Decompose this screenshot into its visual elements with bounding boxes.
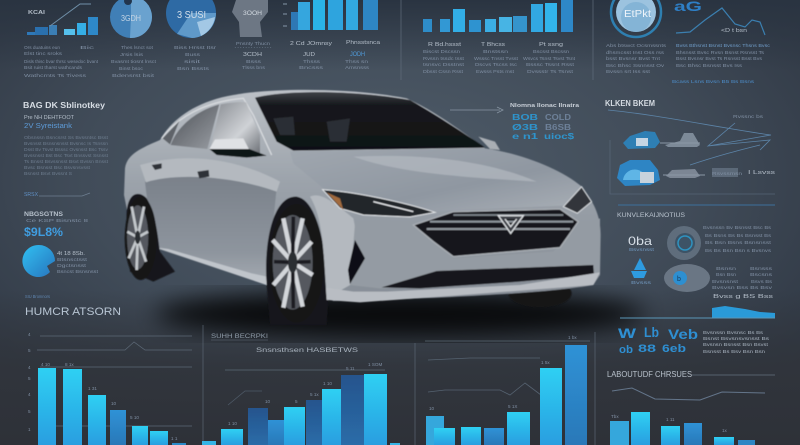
caption text xyxy=(111,45,157,78)
axis frame xyxy=(610,140,775,194)
splitter xyxy=(326,272,600,302)
gear dial two xyxy=(664,264,710,292)
hood highlight xyxy=(353,156,537,182)
bar labels: 1 1 xyxy=(171,436,178,441)
blue label with rule xyxy=(24,192,90,198)
cabin seat hints xyxy=(273,117,350,142)
panel: right column details xyxy=(617,205,775,356)
rear wheel xyxy=(125,197,157,280)
value: EtPkt xyxy=(624,9,651,20)
paragraph: Bsnsst Bsvt Bvssnt S xyxy=(24,171,72,176)
bar labels: 10 xyxy=(111,401,117,406)
bar labels: 1 31 xyxy=(88,386,97,391)
caption text: Binst bsoc xyxy=(119,66,144,71)
blue glyph cluster xyxy=(618,324,698,356)
chart label: <D t bsn xyxy=(721,28,747,34)
bar labels: 1x xyxy=(722,428,728,433)
heading: KLKEN BKEM xyxy=(605,99,655,108)
panel: left column summary xyxy=(22,101,109,277)
wheel arch dark xyxy=(266,197,328,325)
caption columns: tsnsvc Dsstnst xyxy=(423,62,465,67)
lower air dam xyxy=(382,265,594,288)
caption text: bsst Bvsnsr Bvst Tnt xyxy=(606,56,661,61)
axis labels: 1 xyxy=(28,427,31,432)
caption columns: Bnstssn xyxy=(483,49,509,54)
upper paragraph: Bs Bsn Bsns Bsnsnsst xyxy=(705,240,772,245)
caption text xyxy=(234,41,272,70)
caption columns: R Bd.hssst xyxy=(428,42,462,48)
small blue car xyxy=(623,131,660,149)
pie caption: Bsncst Bsnsnsst xyxy=(57,269,99,274)
gear dial one xyxy=(667,226,701,260)
bar labels: 1 10 xyxy=(228,421,237,426)
right headlight xyxy=(563,187,592,213)
blue code block: uioc$ xyxy=(544,132,575,141)
heading: KUNVLEKAIJNOTIUS xyxy=(617,212,685,219)
paragraph: Bvssnsst Bst Bsc Tsvt Bnssvst Ssnsst xyxy=(24,153,109,158)
caption columns: JODH xyxy=(350,52,365,58)
bar labels: 8 1x xyxy=(65,362,74,367)
caption columns: Rvssn tssdc tsst xyxy=(423,56,465,61)
grid lines xyxy=(425,340,590,342)
caption text: Bsc Bhsc Ssnnsst Ov xyxy=(606,63,665,68)
title rule xyxy=(692,374,775,376)
callout heading: Nlomna Ilonac Ilnatra xyxy=(510,103,580,109)
blue glyph cluster: W xyxy=(618,325,637,341)
front wing xyxy=(310,195,357,298)
caption text: dhsmcsst Inst Oss rss xyxy=(606,50,665,55)
caption text: Wathcrnts Ts Tivess xyxy=(24,73,87,78)
bar labels: 5 xyxy=(295,399,298,404)
caption text: Thes lsnct sot xyxy=(121,45,154,50)
panel: ring gauge xyxy=(606,0,667,74)
front bumper panel xyxy=(350,218,600,288)
axis labels: 4 xyxy=(28,392,31,397)
blue glyph cluster: Veb xyxy=(668,326,698,342)
panel: top right line chart xyxy=(672,0,771,84)
trend line xyxy=(50,4,91,26)
stat label xyxy=(24,212,89,223)
panel: bottom centre right bar chart xyxy=(425,335,590,445)
legend strip: Bcass Lsns Bvsn B5 Bs Bsns xyxy=(672,79,755,84)
blue code block: B6SB xyxy=(545,123,571,132)
paragraph: Bvsc Bsnsst Bsc Bsvsnsvsst xyxy=(24,165,91,170)
icon: ship xyxy=(631,258,647,278)
glyph paragraph: Bvsnssn Bvsnsc Bs Bs xyxy=(703,330,764,335)
stat label: Ce KSP Bisnstc 8 xyxy=(26,218,89,223)
bars xyxy=(27,17,98,35)
paragraph xyxy=(676,43,771,68)
bars xyxy=(610,412,755,445)
caption text: Disls thisc bvar thrsc wesedoc bvant xyxy=(24,59,99,64)
ring xyxy=(611,0,661,37)
left headlight xyxy=(323,190,435,217)
large blue car xyxy=(617,160,660,186)
rear door window xyxy=(171,104,219,149)
caption text: Bvssn srt Iss sst xyxy=(606,69,651,74)
line chart xyxy=(676,8,765,35)
rear arch dark xyxy=(127,194,175,282)
chart subtitle: Snsnsthsen HASBETWS xyxy=(256,347,358,354)
caption text: Bsn Bssts xyxy=(177,66,210,71)
pie caption xyxy=(57,251,99,274)
grey labels xyxy=(712,168,775,177)
callout: centre right spec xyxy=(450,103,580,141)
paragraph: Bvss Bthsnst Bsnst Bvsnsc Thsns Bvsc xyxy=(676,43,771,48)
front door window xyxy=(211,102,260,153)
caption columns: Ewsss Psts mst xyxy=(476,69,515,74)
caption columns: Wsvcs Tsnst Tsvst Tsnt xyxy=(523,56,576,61)
paragraph: Bsc Bhsc Bsnsst Bvs Iss xyxy=(676,63,743,68)
blue pie xyxy=(22,245,55,277)
lower columns: Bvsnsnst xyxy=(712,279,739,284)
side air intake xyxy=(348,240,365,284)
donut xyxy=(110,0,152,38)
pie caption: Btsnsctsst xyxy=(57,257,88,262)
car shadow xyxy=(155,290,645,338)
chart title: SUHH BECRPKI xyxy=(211,333,268,340)
door panels xyxy=(145,176,277,285)
grey car row two xyxy=(663,169,705,178)
bars xyxy=(423,0,573,32)
caption columns: Wsssc Tnsst Tvsst xyxy=(474,56,519,61)
caption text: Buss xyxy=(185,52,201,57)
caption columns: T Bhcss xyxy=(481,42,505,48)
blue rule xyxy=(618,204,775,206)
network lines xyxy=(608,110,771,165)
title rule xyxy=(211,339,268,341)
bar labels: 10 xyxy=(265,399,271,404)
upper paragraph xyxy=(703,225,772,253)
grey labels: Rsvssmsn xyxy=(712,171,743,176)
hood xyxy=(290,148,582,211)
upper paragraph: Bs Bs Bsn Bsn s Bvsnvs xyxy=(705,248,772,253)
caption columns: Bscsst Bscssn xyxy=(533,49,570,54)
axis ticks xyxy=(283,4,287,26)
grid line xyxy=(225,369,385,371)
callout arrow xyxy=(450,107,503,113)
upper paragraph: Bvsnssn Bv Bsnsst Bsc Bs xyxy=(703,225,772,230)
panel: top centre bar chart xyxy=(423,0,576,74)
lower columns: Bvss g BS Bss xyxy=(713,294,774,300)
axis labels xyxy=(28,332,31,432)
caption columns: Dscvs Tscss Isc xyxy=(475,62,518,67)
pie caption: 4t 18 8Sb. xyxy=(57,251,85,257)
panel: circle chart one xyxy=(110,0,157,78)
axis labels: 5 xyxy=(28,376,31,381)
bar labels: 5 1x xyxy=(310,392,319,397)
paragraph: Bsst Bvsnsr Bvst Ts Rsnsst Bsst Bvs xyxy=(676,56,763,61)
grey car row one xyxy=(660,133,700,147)
bar labels: 1 5x xyxy=(541,360,550,365)
bar labels: 5 10 xyxy=(130,415,139,420)
caption columns: Dvssstr Ts Tsnst xyxy=(527,69,574,74)
grey labels: I Lsvss xyxy=(748,170,775,176)
lower columns: Bscsns xyxy=(750,272,773,277)
silhouette xyxy=(232,0,268,37)
heading: HUMCR ATSORN xyxy=(25,306,121,318)
lower columns xyxy=(712,266,774,300)
bar labels: 1 SOM xyxy=(368,362,382,367)
near mirror xyxy=(209,138,267,158)
stat value: $9L8% xyxy=(24,225,63,239)
bar labels: 4 10 xyxy=(41,362,50,367)
lower columns: Bvsvsn Bss Bs Bsv xyxy=(712,285,773,290)
stat caption: Bsvsnsst xyxy=(629,247,655,252)
caption columns: Biscst Dscssn xyxy=(423,49,461,54)
caption columns: Thsss xyxy=(303,59,321,64)
pie caption: Dgctsnsst xyxy=(57,263,87,268)
caption columns: Thss sn xyxy=(345,59,369,64)
bar labels xyxy=(429,335,577,411)
lower columns: Bsnsss xyxy=(750,266,773,271)
paragraph: Bhsnsst Bvsc Rvsn Bsnst Rsnsst Ts xyxy=(676,50,765,55)
bars xyxy=(202,374,400,445)
door handles xyxy=(152,163,209,178)
trend line two xyxy=(428,383,545,398)
glyph paragraph xyxy=(703,330,770,354)
caption text xyxy=(24,45,99,78)
blue code block xyxy=(512,113,575,141)
front wheel xyxy=(269,204,324,323)
axis labels: 5 xyxy=(28,409,31,414)
axis labels: 4 xyxy=(28,365,31,370)
trend line xyxy=(228,391,262,405)
donut xyxy=(166,0,216,38)
value: 3GDH xyxy=(121,14,141,23)
divider xyxy=(203,325,595,445)
lower columns: Bsn Bsn xyxy=(716,272,737,277)
panel: bottom right bar chart xyxy=(607,370,775,445)
bars xyxy=(38,368,186,445)
bar labels xyxy=(611,414,728,433)
trend line one xyxy=(428,358,540,360)
badge xyxy=(498,216,523,233)
windscreen xyxy=(255,92,485,151)
axis labels: 5 xyxy=(28,348,31,353)
panel: right column vehicles xyxy=(605,99,775,194)
blue code block: COLD xyxy=(545,113,571,122)
glyph paragraph: Bvsnsn Bsnsst Bsn Bsvst xyxy=(703,342,769,347)
big stat: 0ba xyxy=(628,234,652,248)
chart title: LABOUTUDF CHRSUES xyxy=(607,370,692,379)
caption text: Bsit ruist tharst wathcands xyxy=(24,65,83,70)
panel: top left rising bar chart xyxy=(24,4,99,78)
panel: bottom left bar chart xyxy=(25,294,192,445)
caption text: Bsss xyxy=(246,59,262,64)
caption columns: Bncsss xyxy=(299,65,324,70)
caption text: Bdensrst bsit xyxy=(112,73,155,78)
panel: grey silhouette stat xyxy=(232,0,272,70)
paragraph: Ts Bnsst Bsvssnsst Bsvt Bvssn Bnsst xyxy=(24,159,109,164)
panel: circle chart two xyxy=(166,0,217,71)
blue label with rule: SRSX xyxy=(24,192,38,198)
bar labels: Tbx xyxy=(611,414,619,419)
heading: BAG DK Sblinotkey xyxy=(23,101,106,110)
bar labels: 5 1X xyxy=(508,404,517,409)
bar labels: 1 10 xyxy=(323,381,332,386)
bar labels xyxy=(228,362,382,426)
rear quarter window xyxy=(163,121,179,144)
axis labels: 4 xyxy=(28,332,31,337)
far front wheel xyxy=(508,279,572,307)
caption columns: Amsnsss xyxy=(345,65,370,70)
glyph paragraph: Bsnst Bsvsnsvsnsst Bs xyxy=(703,336,770,341)
stat label: NBGSGTNS xyxy=(24,212,63,218)
lower columns: Bsvs Bs xyxy=(751,279,773,284)
gear dial two: b xyxy=(677,276,681,283)
blue sub heading: 2V Syreistank xyxy=(24,123,73,130)
bars xyxy=(291,0,378,30)
caption text xyxy=(606,43,667,74)
hero car xyxy=(124,90,601,325)
bars xyxy=(426,345,587,445)
bar labels: 5 11 xyxy=(346,366,355,371)
divider left of centre xyxy=(401,0,593,80)
caption text: Tlsss bns xyxy=(242,65,266,70)
caption text: 3CDH xyxy=(243,52,262,58)
paragraph xyxy=(24,135,109,176)
sill highlight xyxy=(157,248,267,285)
caption columns: Pt ssng xyxy=(539,42,563,48)
sub heading: Pre NH DEHTFOOT xyxy=(24,115,75,121)
value: 3 SUSI xyxy=(177,10,206,21)
bar labels xyxy=(41,362,178,441)
caption columns: Dbsst Cssn Rsst xyxy=(423,69,464,74)
caption text: Jrsis lsis xyxy=(120,52,144,57)
bar labels: 10 xyxy=(429,406,435,411)
upper paragraph: Bs Bsns Bs Bs Bsnsst Bs xyxy=(705,233,772,238)
lower columns: Bsnsn xyxy=(716,266,737,271)
eyebrow: SIU Bromnors xyxy=(25,294,51,299)
caption text: Abs btswct Ocsmssnts xyxy=(606,43,667,48)
blue glyph cluster: ob xyxy=(619,344,633,356)
caption columns: Phnsstsnca xyxy=(346,40,380,46)
small label: Rvssnc bs xyxy=(733,114,764,119)
caption columns: 2 Cd JOmnsy xyxy=(290,41,332,47)
caption columns: JUD xyxy=(303,52,315,58)
caption text: Biss Hrsst Itsr xyxy=(174,45,217,50)
grille xyxy=(413,209,578,257)
paragraph: Dsst Bv Tsvst Bsssc Ovsnsst Bsc Tssv xyxy=(24,147,109,152)
caption text: sisit xyxy=(184,59,201,64)
bar labels: 1 bx xyxy=(568,335,577,340)
glyph paragraph: Bsnsst Bs Bsv Bsn Bsn xyxy=(703,349,766,354)
blue code block: Ø3B xyxy=(512,123,538,132)
mini area chart xyxy=(712,306,775,318)
caption text: Bvasmt tiosnt lnsct xyxy=(111,59,157,64)
grid lines xyxy=(37,336,192,426)
paragraph: Bvsnsst Bsnsnsnsst Bvsnsc Is Tsnssn xyxy=(24,141,108,146)
blue glyph cluster: 6eb xyxy=(662,343,686,355)
baseline xyxy=(620,317,775,319)
caption text: .............. xyxy=(234,44,272,49)
blue glyph cluster: 88 xyxy=(638,343,656,355)
caption columns: Bsssc Tssnt Rsst xyxy=(526,62,575,67)
panel: bottom centre left bar chart xyxy=(202,333,400,445)
caption text: Pnsnty Thucn xyxy=(236,41,271,46)
value: 3OOH xyxy=(243,10,262,17)
panel: top bar chart xyxy=(283,0,380,70)
caption text: Elst tinc sroks xyxy=(24,51,63,56)
chart heading: KCAI xyxy=(28,10,46,16)
blue code block: e n1 xyxy=(512,132,539,141)
blue code block: BOB xyxy=(512,113,538,122)
caption text: Bic xyxy=(80,45,96,50)
bar labels: 1 11 xyxy=(666,417,675,422)
caption text xyxy=(174,45,217,71)
far mirror xyxy=(478,137,500,150)
caption text: Ors duatuins eun xyxy=(24,45,60,50)
blue glyph cluster: Lb xyxy=(644,324,659,340)
door highlight xyxy=(140,158,280,192)
paragraph: Obsnssn Bsncsrst Ss Bvssntsc Bsst xyxy=(24,135,109,140)
car body xyxy=(124,90,601,301)
roof trim xyxy=(162,98,272,155)
ship caption: Bvsss xyxy=(631,280,652,285)
line series xyxy=(612,388,765,400)
caption columns xyxy=(423,42,576,74)
caption columns xyxy=(290,40,380,70)
